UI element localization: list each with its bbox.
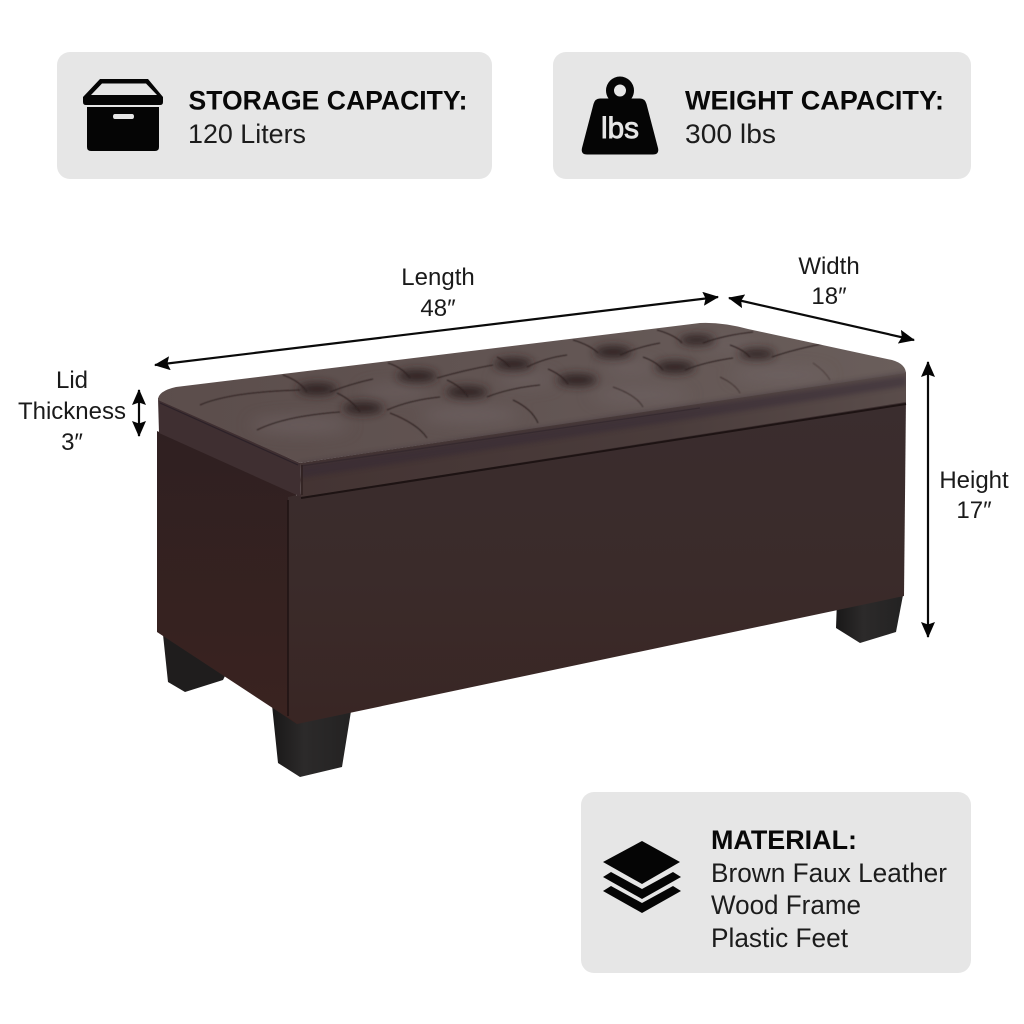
height arrow — [927, 362, 929, 637]
dimension: height: Height — [939, 467, 1009, 494]
length arrow — [155, 297, 718, 365]
dimension: width — [729, 253, 914, 340]
heading: weight capacity: WEIGHT CAPACITY: — [685, 86, 944, 116]
value: weight capacity: 300 lbs — [685, 119, 776, 149]
pillow highlights — [269, 410, 490, 431]
dimension: lid thickness: Thickness — [18, 398, 126, 425]
lid shadow line — [301, 404, 906, 498]
dimension: height — [928, 362, 1009, 637]
bench body left side — [157, 431, 297, 724]
lid stitching — [160, 403, 700, 495]
heading: material: MATERIAL: — [711, 825, 857, 855]
front dark edge — [300, 372, 906, 470]
dimension: lid thickness: 3″ — [61, 429, 83, 456]
icon: weight: lbs — [601, 112, 639, 145]
icon: layers — [603, 841, 681, 913]
lid left side — [158, 398, 301, 497]
tuft dimples — [297, 335, 775, 414]
dimension: width: Width — [798, 253, 860, 280]
bench illustration — [150, 315, 915, 777]
panel: weight capacity — [553, 52, 971, 179]
bench legs — [162, 590, 904, 777]
panel: material — [581, 792, 971, 973]
dimension: width: 18″ — [811, 283, 847, 310]
dimension: length: Length — [401, 264, 475, 291]
lid front dark band under seam — [300, 376, 906, 478]
tuft seams — [200, 330, 830, 438]
dimension: length — [155, 264, 718, 365]
material list: Plastic Feet — [711, 923, 849, 953]
corner seam — [287, 500, 289, 716]
dimension: lid thickness: Lid — [56, 367, 88, 394]
width arrow — [729, 298, 914, 340]
material list: Brown Faux Leather — [711, 858, 947, 888]
panel: storage capacity — [57, 52, 492, 179]
dimension: lid thickness — [18, 367, 139, 456]
dimension: height: 17″ — [956, 497, 992, 524]
icon: storage box — [83, 79, 163, 151]
material list: Wood Frame — [711, 890, 861, 920]
bench body front — [288, 398, 906, 724]
lid top tufted surface — [158, 322, 906, 463]
material list — [711, 858, 947, 953]
lid front — [300, 372, 906, 497]
heading: storage capacity: STORAGE CAPACITY: — [188, 86, 468, 116]
lid thickness arrow — [138, 390, 140, 436]
icon: weight — [582, 76, 658, 154]
value: storage capacity: 120 Liters — [188, 119, 306, 149]
dimension: length: 48″ — [420, 295, 456, 322]
